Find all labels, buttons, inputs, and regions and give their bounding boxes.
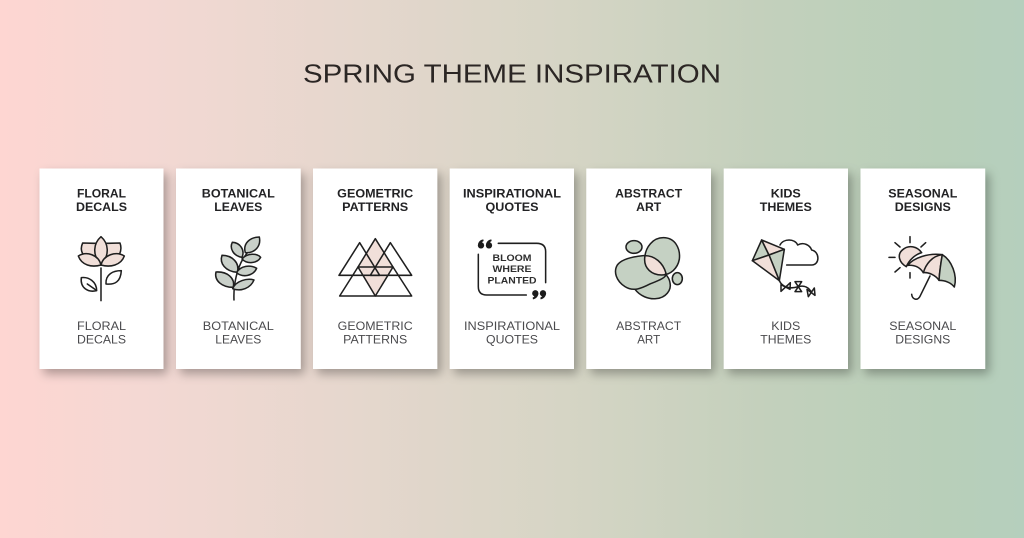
label: botanical leaves: BOTANICAL — [203, 319, 274, 333]
label: geometric patterns: PATTERNS — [343, 332, 407, 346]
heading: inspirational quotes: INSPIRATIONAL — [463, 186, 561, 200]
label: seasonal designs — [889, 319, 957, 346]
quote text: PLANTED — [488, 274, 537, 286]
label: inspirational quotes: INSPIRATIONAL — [464, 319, 560, 333]
heading: geometric patterns: PATTERNS — [342, 200, 408, 214]
icon: kite and cloud — [752, 240, 818, 297]
heading: seasonal designs: SEASONAL — [888, 186, 957, 200]
heading: geometric patterns: GEOMETRIC — [337, 186, 414, 200]
icon: lotus flower — [78, 237, 124, 301]
panel: inspirational quotes — [450, 168, 574, 369]
label: botanical leaves: LEAVES — [215, 332, 261, 346]
heading: floral decals: DECALS — [76, 200, 127, 214]
heading: botanical leaves: BOTANICAL — [202, 186, 275, 200]
heading: botanical leaves: LEAVES — [214, 200, 262, 214]
label: abstract art — [616, 319, 681, 346]
heading: botanical leaves — [202, 186, 275, 214]
panel: geometric patterns — [313, 168, 437, 369]
heading: kids themes: KIDS — [771, 186, 801, 200]
heading: abstract art — [615, 186, 683, 214]
heading: inspirational quotes — [463, 186, 561, 214]
icon: organic blobs — [616, 238, 682, 299]
quote text: BLOOM — [492, 252, 532, 263]
label: floral decals: DECALS — [77, 332, 126, 346]
label: inspirational quotes — [464, 319, 560, 346]
heading: abstract art: ABSTRACT — [615, 186, 683, 200]
title: SPRING THEME INSPIRATION — [303, 60, 721, 88]
label: seasonal designs: SEASONAL — [889, 319, 957, 333]
heading: seasonal designs — [888, 186, 957, 214]
heading: inspirational quotes: QUOTES — [486, 200, 539, 214]
label: botanical leaves — [203, 319, 274, 346]
label: abstract art: ABSTRACT — [616, 319, 681, 333]
heading: kids themes: THEMES — [760, 200, 812, 214]
icon: overlapping triangles — [339, 239, 412, 296]
panel: floral decals — [40, 168, 164, 369]
label: kids themes: KIDS — [771, 319, 800, 333]
panel: seasonal designs — [860, 168, 985, 369]
icon: sun and umbrella — [889, 237, 955, 299]
label: seasonal designs: DESIGNS — [895, 332, 950, 346]
label: inspirational quotes: QUOTES — [486, 332, 538, 346]
label: floral decals: FLORAL — [77, 319, 126, 333]
heading: floral decals: FLORAL — [77, 186, 126, 200]
panel: kids themes — [724, 168, 848, 369]
heading: floral decals — [76, 186, 127, 214]
heading: seasonal designs: DESIGNS — [895, 200, 951, 214]
icon: quote frame — [478, 239, 546, 299]
heading: geometric patterns — [337, 186, 414, 214]
panel: botanical leaves — [176, 168, 301, 369]
label: geometric patterns — [338, 319, 413, 346]
label: kids themes: THEMES — [760, 332, 811, 346]
quote text: WHERE — [492, 263, 532, 274]
label: floral decals — [77, 319, 126, 346]
label: abstract art: ART — [637, 332, 660, 346]
heading: kids themes — [760, 186, 812, 214]
label: kids themes — [760, 319, 811, 346]
heading: abstract art: ART — [636, 200, 662, 214]
panel: abstract art — [586, 168, 711, 369]
quote text — [488, 252, 537, 286]
icon: leafy branch — [216, 237, 261, 300]
label: geometric patterns: GEOMETRIC — [338, 319, 413, 333]
